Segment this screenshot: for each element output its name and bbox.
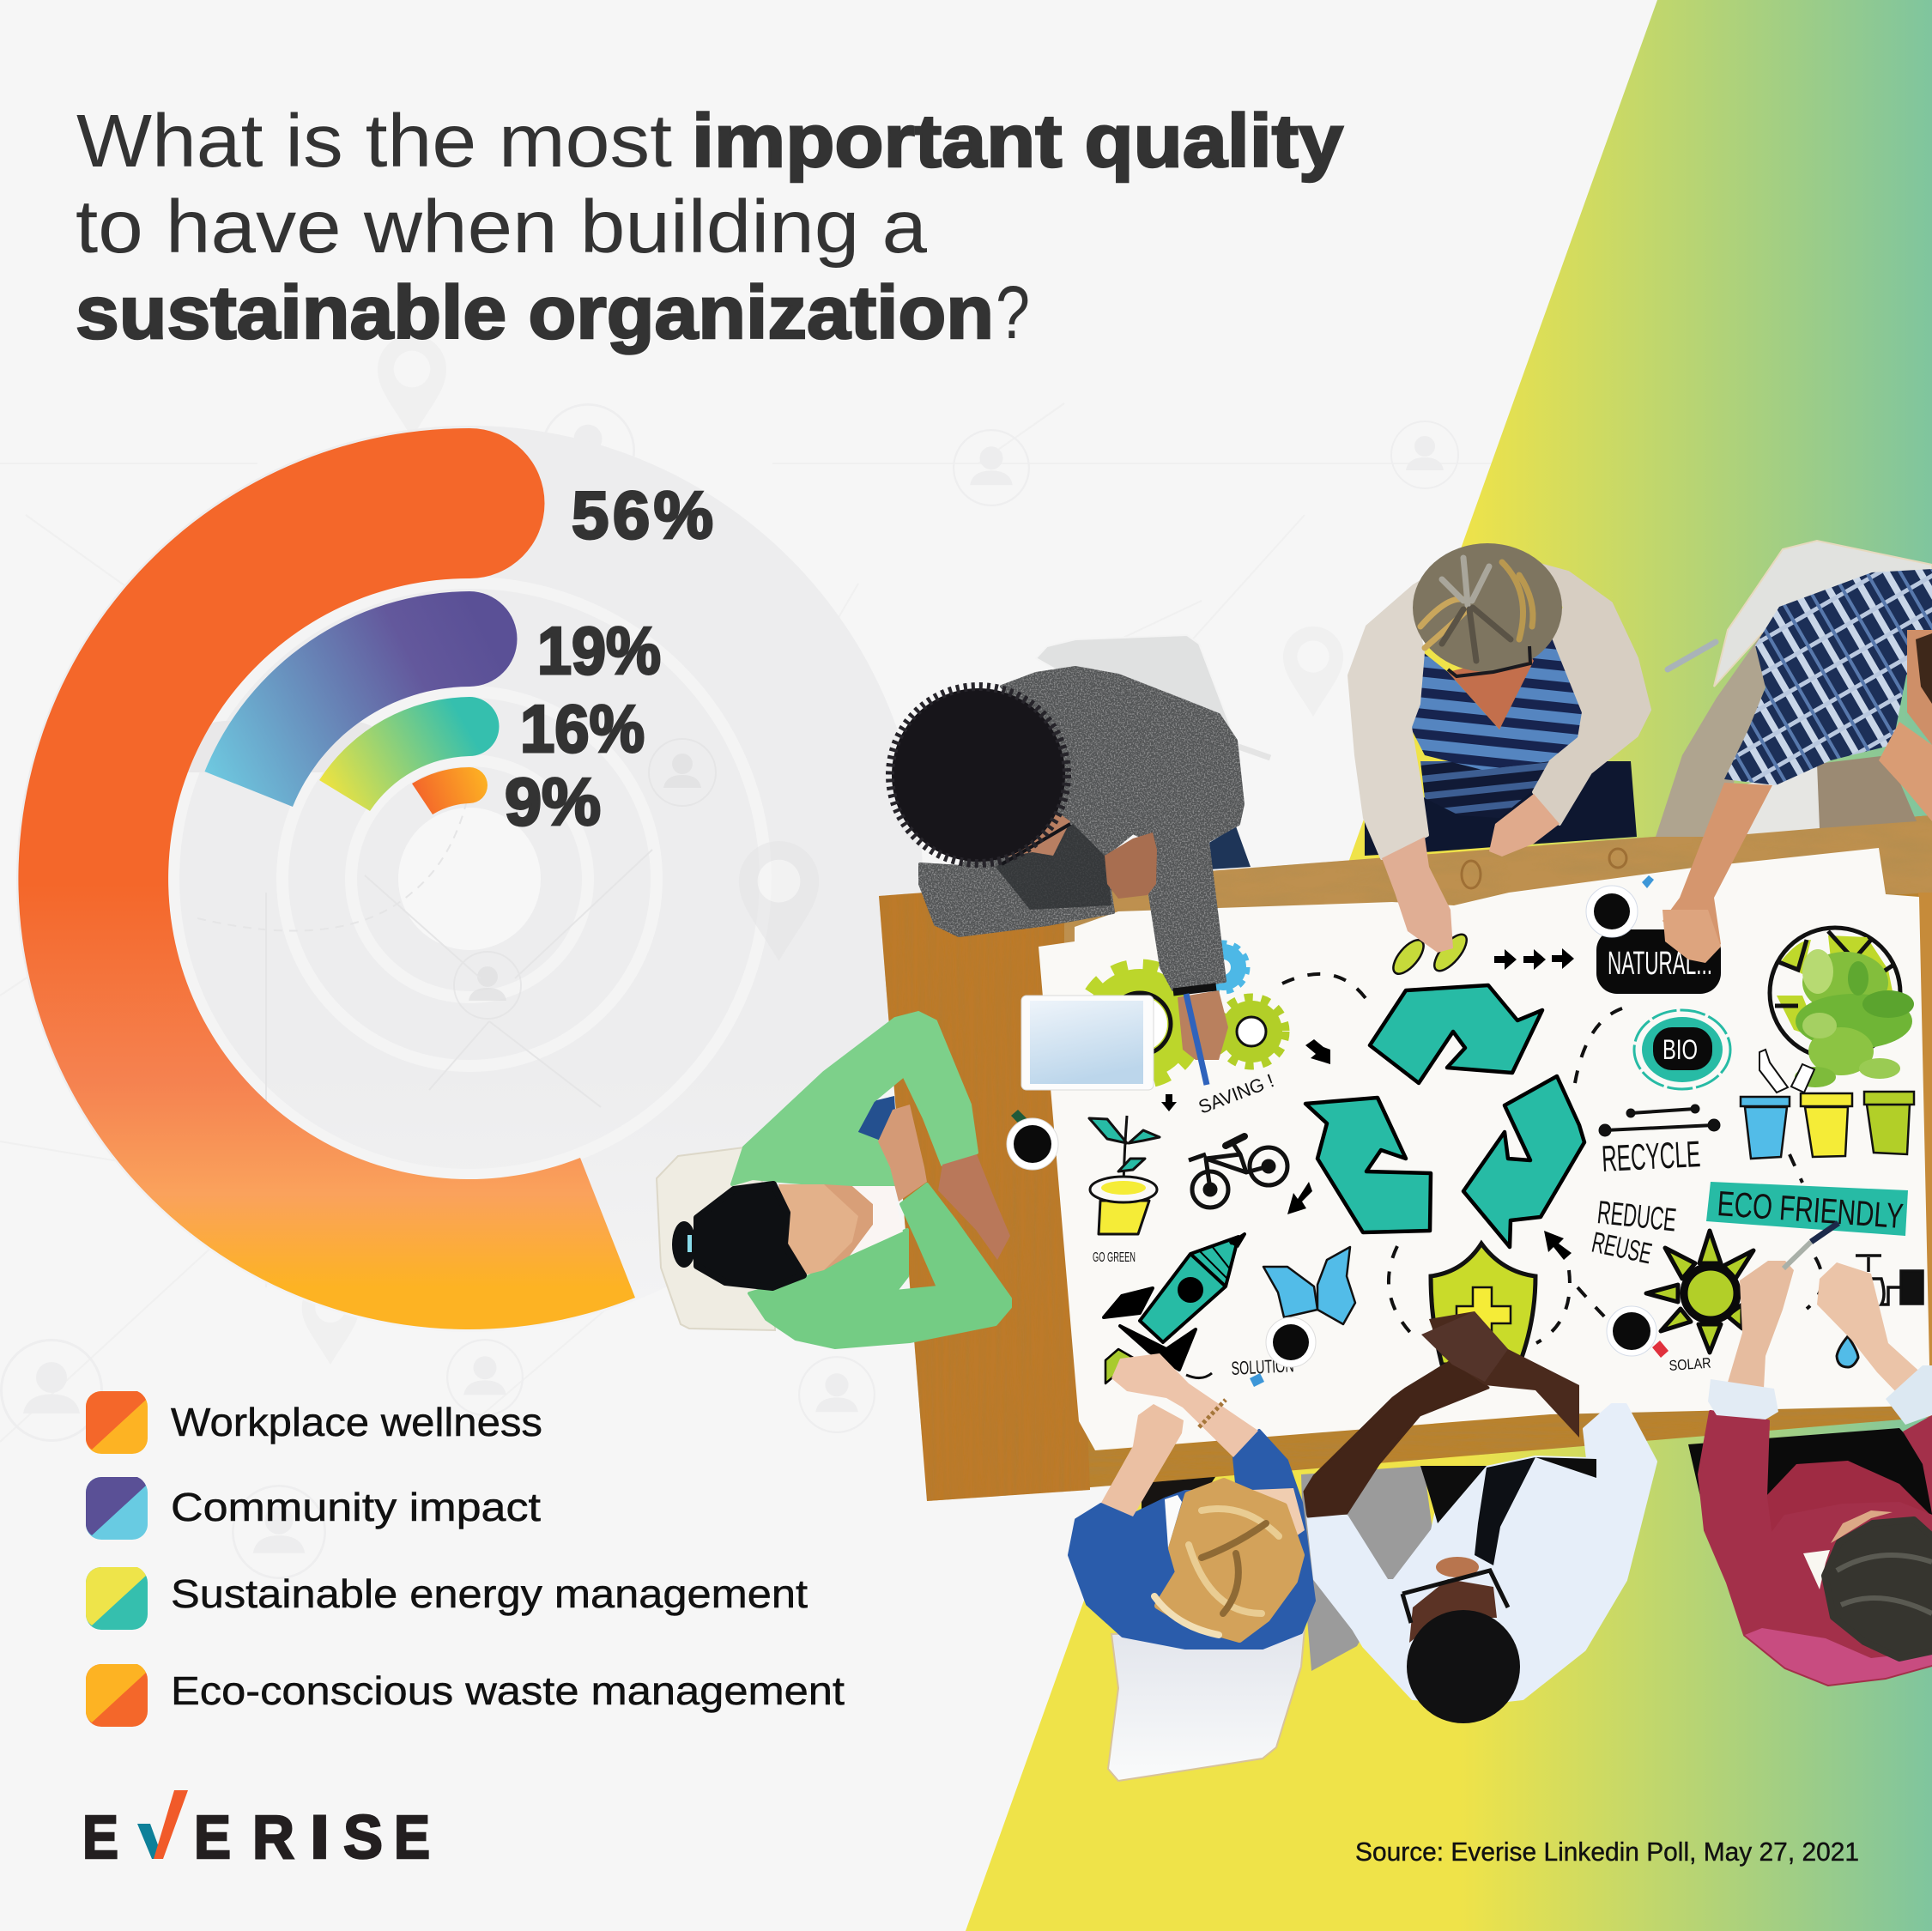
- bar: eco-conscious waste 9%: [412, 767, 488, 814]
- legend: [86, 1391, 845, 1727]
- value labels: 16%: [520, 691, 645, 766]
- icon: bio badge: [1634, 1010, 1730, 1089]
- photo illustration: team around table: [657, 541, 1932, 1781]
- big faint circle behind donut: [16, 426, 923, 1332]
- value labels: 56%: [572, 477, 713, 553]
- icon: leaves: [1388, 929, 1472, 978]
- person: dark jacket with curly hair: [890, 668, 1251, 1085]
- icon: globe: [1770, 928, 1900, 1058]
- icon: plant leaves: [1795, 949, 1914, 1087]
- chair arm: [1668, 642, 1716, 669]
- icon: natural badge: [1596, 929, 1721, 994]
- text: recycle words: RECYCLE: [1601, 1134, 1701, 1180]
- text: board labels: GO GREEN: [1093, 1250, 1136, 1265]
- text: board labels: SOLUTION: [1231, 1354, 1294, 1379]
- text: recycle words: REUSE: [1589, 1226, 1655, 1270]
- person: blonde woman in blue: [1069, 1353, 1314, 1648]
- bar: community impact 19%: [204, 591, 517, 807]
- text: board labels: SAVING !: [1196, 1069, 1277, 1118]
- logo: Everise: E: [194, 1804, 231, 1872]
- text: recycle words: [1589, 1134, 1701, 1270]
- pen in hand: [1784, 1223, 1838, 1268]
- radial bar chart: [18, 428, 713, 1329]
- legend item: workplace wellness: Workplace wellness: [171, 1400, 542, 1444]
- icon: sun: [1646, 1231, 1753, 1353]
- chair: top left: [1036, 635, 1236, 741]
- value labels: [505, 477, 713, 839]
- person: man in white shirt: [1305, 1311, 1656, 1723]
- logo: Everise: E: [394, 1804, 430, 1872]
- legend item: eco-conscious waste management: [86, 1664, 845, 1727]
- chair: bottom: [1108, 1629, 1305, 1781]
- value labels: 19%: [537, 613, 661, 688]
- background network pattern: [0, 335, 1493, 1578]
- legend item: eco-conscious waste management: Eco-conscious waste management: [171, 1668, 845, 1713]
- title: ?: [996, 271, 1030, 354]
- bar: sustainable energy 16%: [319, 697, 500, 811]
- chair leg: [1239, 747, 1270, 758]
- icon: rocket: [1104, 1234, 1245, 1383]
- right table edge: [1918, 893, 1932, 1412]
- title: sustainable organization: [76, 271, 994, 354]
- logo: Everise: E: [82, 1804, 118, 1872]
- person: woman in cardigan: [1349, 543, 1650, 953]
- title: to have when building a: [76, 185, 928, 269]
- icon: tablet: [1021, 996, 1154, 1090]
- icon: natural badge: NATURAL...: [1608, 946, 1712, 982]
- right gradient background panel: [966, 0, 1932, 1931]
- table: [879, 815, 1932, 1501]
- icon: butterfly: [1263, 1247, 1355, 1324]
- logo: Everise: [82, 1790, 430, 1872]
- wood knots: [1462, 849, 1626, 888]
- table base wood: [927, 815, 1932, 1501]
- icon: connector with ring: [1186, 1373, 1212, 1378]
- icon: bicycle: [1189, 1136, 1287, 1208]
- icon: water drop: [1837, 1336, 1858, 1367]
- icon: water tap: [1850, 1256, 1923, 1304]
- icon: connector lines: [1599, 1105, 1720, 1136]
- text: board labels: [1093, 1069, 1711, 1379]
- floor under table: [1301, 1466, 1432, 1671]
- legend item: community impact: Community impact: [171, 1485, 541, 1529]
- text: recycle words: REDUCE: [1596, 1195, 1678, 1239]
- icon: small arrows: [1161, 948, 1574, 1260]
- legend item: sustainable energy management: Sustainable energy management: [171, 1571, 808, 1616]
- chair: top right: [1714, 541, 1932, 687]
- bar: workplace wellness 56%: [18, 428, 635, 1329]
- text: board labels: SOLAR: [1669, 1355, 1711, 1374]
- shadow under table: [1688, 1428, 1932, 1519]
- icon: potted seedling: [1089, 1116, 1160, 1234]
- title: What is the most: [76, 100, 672, 183]
- logo: Everise: I: [310, 1804, 330, 1872]
- title: [76, 100, 1343, 354]
- icon: shield: [1431, 1244, 1535, 1365]
- title: important quality: [692, 100, 1343, 183]
- icon: bottle and can: [1759, 1050, 1814, 1093]
- coffee cups: [1007, 875, 1669, 1387]
- legend item: sustainable energy management: [86, 1567, 808, 1630]
- person: man in red sweater: [1699, 1261, 1932, 1685]
- shadow behind blonde woman: [1142, 1472, 1219, 1510]
- icon: gears: [1081, 943, 1286, 1082]
- table left wood: [879, 882, 1090, 1501]
- logo: Everise: R: [252, 1804, 294, 1872]
- paper sheets: [1039, 848, 1929, 1450]
- table top strip wood: [1064, 815, 1932, 944]
- dashed paths: [1282, 974, 1822, 1343]
- legend item: community impact: [86, 1477, 541, 1540]
- legend item: workplace wellness: [86, 1391, 542, 1454]
- value labels: 9%: [505, 764, 601, 839]
- chair: left: [657, 1147, 775, 1330]
- person: man in plaid shirt: [1656, 569, 1932, 961]
- icon: recycle arrows: [1305, 985, 1584, 1247]
- logo: Everise: S: [343, 1804, 383, 1872]
- icon: bio badge: BIO: [1662, 1034, 1698, 1065]
- source note: Source: Everise Linkedin Poll, May 27, 2021: [1355, 1837, 1859, 1867]
- person: woman in green: [672, 1013, 1010, 1347]
- icon: plant pots: [1741, 1092, 1914, 1159]
- hand on natural badge: [1662, 910, 1721, 963]
